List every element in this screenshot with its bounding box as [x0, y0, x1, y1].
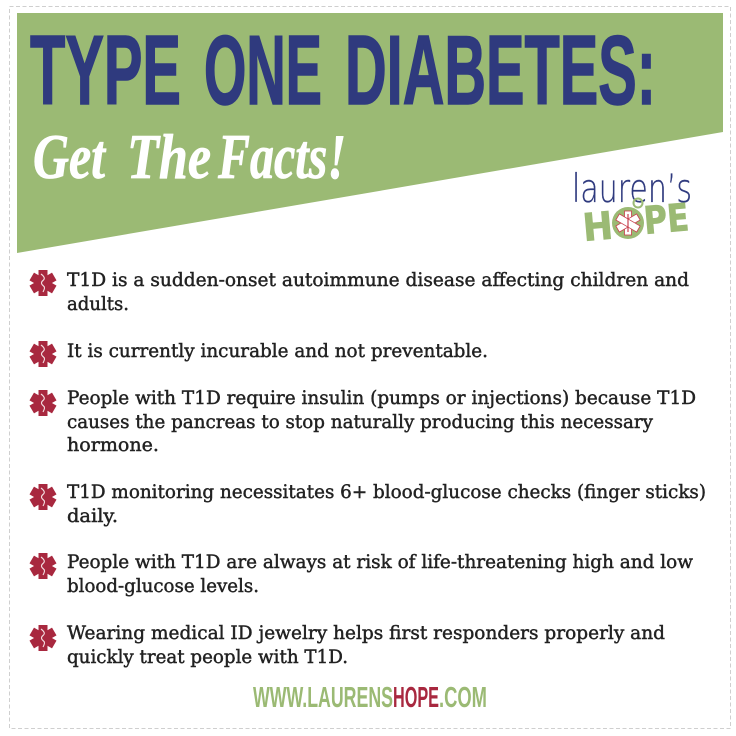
fact 1	[29, 270, 689, 315]
title: TYPE	[30, 15, 181, 125]
fact 1 text: adults.	[67, 294, 129, 315]
fact 1 text: T1D is a sudden-onset autoimmune disease affecting children and	[67, 270, 689, 291]
fact 3 text: hormone.	[67, 435, 159, 456]
icon: medical star	[29, 553, 57, 579]
fact 5	[29, 552, 693, 597]
logo: lauren's hope: lauren’s	[572, 167, 692, 212]
website url: HOPE	[393, 682, 439, 714]
fact 4 text: T1D monitoring necessitates 6+ blood-glucose checks (finger sticks)	[67, 482, 706, 503]
fact 3 text: People with T1D require insulin (pumps or injections) because T1D	[67, 388, 696, 409]
fact 3 text: causes the pancreas to stop naturally producing this necessary	[67, 412, 654, 433]
icon: medical star	[29, 270, 57, 296]
fact 5 text: blood-glucose levels.	[67, 576, 259, 597]
fact 6	[29, 623, 665, 668]
icon: medical star	[29, 341, 57, 367]
subtitle: Get	[33, 121, 107, 192]
fact 2 text: It is currently incurable and not preventable.	[67, 341, 488, 362]
fact 4	[29, 482, 706, 527]
logo word: PE: PE	[642, 195, 691, 243]
icon: medical star	[29, 390, 57, 416]
website url: WWW.LAURENS	[253, 682, 393, 714]
logo: lauren's hope	[572, 167, 692, 250]
fact 5 text: People with T1D are always at risk of life-threatening high and low	[67, 552, 693, 573]
logo word: H: H	[581, 204, 615, 250]
subtitle: The	[127, 121, 211, 192]
icon: medical star	[29, 625, 57, 651]
green header banner	[17, 13, 723, 253]
logo medallion	[612, 198, 644, 239]
fact 3	[29, 388, 696, 456]
fact 2	[29, 341, 488, 367]
website url: .COM	[439, 682, 487, 714]
icon: medical star	[29, 484, 57, 510]
fact 6 text: quickly treat people with T1D.	[67, 647, 348, 668]
fact 4 text: daily.	[67, 506, 118, 527]
fact 6 text: Wearing medical ID jewelry helps first responders properly and	[67, 623, 665, 644]
title: ONE	[204, 15, 322, 125]
subtitle: Facts!	[217, 121, 346, 192]
